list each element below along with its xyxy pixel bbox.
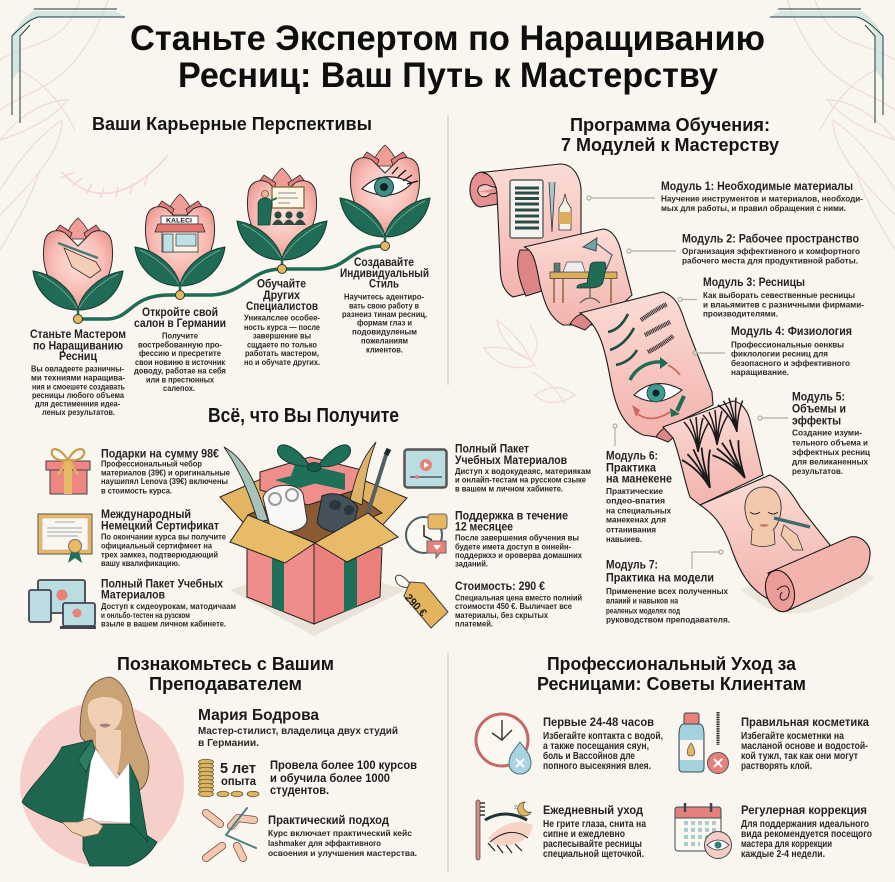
heading: teacher: Преподавателем xyxy=(149,673,302,694)
career step 1 text: Станьте Мастером xyxy=(30,327,126,341)
courses stat: Провела более 100 курсов xyxy=(270,760,417,772)
tip 1 text: а также посещания сяун, xyxy=(543,741,649,752)
courses stat xyxy=(270,760,417,797)
hand xyxy=(62,818,103,837)
icon: clock with drop xyxy=(476,714,531,774)
heading: care tips xyxy=(537,653,806,694)
career step 4 text: Индивидуальный xyxy=(340,266,429,280)
icon: bottle and mascara xyxy=(679,712,728,774)
panel: teacher xyxy=(20,653,417,866)
career step 4 text: Научитесь адентиро- xyxy=(344,292,424,301)
career step 4 text: формам глаз и xyxy=(357,319,412,328)
right item 3 text: Стоимость: 290 € xyxy=(455,579,545,593)
module 5: эффектных ресниц xyxy=(792,448,870,457)
right item 3 text: платемей. xyxy=(455,620,493,629)
module 7: влаиий и навыков на xyxy=(606,596,678,605)
top roll and segment 1 xyxy=(470,164,581,297)
career step 2 text: Откройте свой xyxy=(142,305,218,319)
tip 1 text: Первые 24-48 часов xyxy=(543,715,654,729)
tweezers and brush xyxy=(224,442,389,522)
heading: teacher: Познакомьтесь с Вашим xyxy=(117,653,334,674)
lips xyxy=(99,724,111,728)
career step 2 text: свои новиню в источник xyxy=(135,358,226,367)
dividers xyxy=(447,115,449,872)
module 7 xyxy=(606,550,730,625)
career step 3 text: но и обучате других. xyxy=(244,357,320,367)
gift 1 text: материалов (39€) и оригинальные xyxy=(101,468,230,477)
career step 1 text: ресницы любого объема xyxy=(32,390,124,400)
blouse xyxy=(83,746,130,823)
career step 3 text: ность курса — после xyxy=(244,323,320,332)
module 5: тельного объема и xyxy=(792,437,868,447)
module 7: реаленых моделях под xyxy=(606,606,681,615)
icon: price tag xyxy=(395,575,448,628)
flower 3: teach xyxy=(237,168,327,274)
right item 3 text xyxy=(455,579,582,629)
career step 3 text: Уникалслее особее- xyxy=(244,313,320,323)
tip 3 text: Не грите глаза, снита на xyxy=(543,819,646,830)
courses stat: студентов. xyxy=(270,785,329,797)
right item 3 text: материалы, без скрытых xyxy=(455,610,548,620)
icon: hands xyxy=(206,808,256,858)
heading: care tips: Ресницами: Советы Клиентам xyxy=(537,673,806,694)
module 2: Организация эффективного и комфортного xyxy=(682,247,860,256)
module 3 xyxy=(678,275,864,319)
dark earbuds case xyxy=(317,494,358,532)
career step 4 text: Создавайте xyxy=(354,255,414,269)
module 7: руководством преподавателя. xyxy=(606,616,730,625)
flower 2: salon xyxy=(135,194,225,300)
gift 2 text xyxy=(101,507,226,568)
gift box illustration xyxy=(220,442,407,636)
module 4: Профессиональные оенквы xyxy=(731,340,844,349)
module 6: Практические xyxy=(606,487,663,496)
module 6: Модуль 6: xyxy=(606,448,658,462)
gift 1 text xyxy=(101,446,230,495)
heading: teacher xyxy=(117,653,334,694)
career step 2 text: или в престюнных xyxy=(146,375,214,384)
heading: program: Программа Обучения: xyxy=(570,114,770,135)
tip 4 text: каждые 2-4 недели. xyxy=(741,849,825,860)
gift 1 text: наушипял Lenova (39€) включены xyxy=(101,477,228,486)
box interior xyxy=(248,490,382,543)
career step 2 text: доводу, работае на себя xyxy=(134,365,226,375)
heading: career: Ваши Карьерные Перспективы xyxy=(92,113,372,134)
teacher name: Мастер-стилист, владелица двух студий xyxy=(198,726,398,737)
pink circle xyxy=(20,702,184,866)
blazer xyxy=(22,740,148,842)
tip 1 text: Избегайте коптакта с водой, xyxy=(543,731,663,742)
module 3: и влаьямитев с разничными фирмами- xyxy=(703,300,864,309)
career step 2 text: фессию и пресретите xyxy=(139,349,221,358)
gift 3 text: и онльбо-тестен на рузском xyxy=(101,610,190,620)
career step 4 text: Стиль xyxy=(369,277,399,291)
heading: care tips: Профессиональный Уход за xyxy=(547,653,797,674)
practical approach text: Практический подход xyxy=(268,813,389,827)
right item 2 text xyxy=(455,508,582,569)
earbuds case xyxy=(263,485,307,532)
career step 4 text: пожеланиям xyxy=(361,336,408,345)
module 2: Модуль 2: Рабочее пространство xyxy=(682,231,859,245)
right item 2 text: поддержхэ и ороверва домашних xyxy=(455,551,582,560)
module 6: на манекене xyxy=(606,472,672,486)
module 6: на специальных xyxy=(606,506,671,515)
experience badge: опыта xyxy=(221,774,256,788)
module 1: мых для работы, и правил обращения с ними. xyxy=(661,203,846,213)
back flaps xyxy=(220,476,280,530)
skirt xyxy=(83,824,157,866)
teacher name: Мария Бодрова xyxy=(198,707,319,724)
flower 2: salon: KALECI xyxy=(166,218,192,224)
career step 2 text xyxy=(134,305,226,393)
career step 3 text: завершение вы xyxy=(253,332,311,341)
lapel xyxy=(78,740,95,772)
heading: program: 7 Модулей к Мастерству xyxy=(561,134,780,155)
module 3: производителями. xyxy=(703,310,778,319)
practical approach text: освоения и улучшения мастерства. xyxy=(268,849,417,858)
module 6: опдео-впатия xyxy=(606,496,665,505)
module 1: Научение инструментов и материалов, необходи- xyxy=(661,194,863,204)
teacher name: в Германии. xyxy=(198,738,259,749)
career step 3 text: сщдаете по только xyxy=(247,340,317,349)
scroll illustration xyxy=(470,164,875,615)
career step 2 text: востребованную про- xyxy=(138,339,222,349)
icon: eye and lash brush: z xyxy=(514,804,518,811)
tip 3 text: сипне и ежедлевно xyxy=(543,829,625,840)
icon: devices xyxy=(29,580,96,629)
career path line xyxy=(78,246,385,319)
tip 2 text: Избегайте косметнки на xyxy=(741,731,844,742)
tip 4 text: мастера для коррекции xyxy=(741,839,832,850)
module 5: Создание изуми- xyxy=(792,429,862,438)
right item 1 text: Диступ х водокудеаяс, материякам xyxy=(455,467,591,476)
tip 1 text xyxy=(543,715,663,772)
career step 1 text: Вы овладеете разничны- xyxy=(31,365,124,374)
gift 2 text: Международный xyxy=(101,507,191,521)
right item 2 text: будете имета доступ в оннейн- xyxy=(455,541,571,551)
gift 2 text: Немецкий Сертификат xyxy=(101,518,219,532)
gift 3 text xyxy=(101,576,236,629)
gift 2 text: вашу квалификацию. xyxy=(101,559,180,568)
gift 3 text: взыле в вашем личном кабинете. xyxy=(101,619,226,629)
career step 1 text: по Наращиванию xyxy=(33,338,123,352)
experience badge: 5 лет xyxy=(220,760,256,777)
box shadow xyxy=(230,560,405,636)
gift 2 text: официальный сертифмеет на xyxy=(101,541,212,550)
module 5: Модуль 5: xyxy=(792,390,845,404)
career step 4 text xyxy=(340,255,429,354)
heading: program xyxy=(561,114,780,155)
career step 1 text xyxy=(30,327,126,417)
tip 4 text: Регулерная коррекция xyxy=(741,803,867,817)
tip 4 text xyxy=(741,803,872,860)
right item 3 text: стоимости 450 €. Выличает все xyxy=(455,602,572,611)
gift 2 text: По окончании курса вы получите xyxy=(101,532,226,541)
neck and face xyxy=(96,730,121,778)
title frame corners xyxy=(12,9,883,123)
tip 4 text: Для поддержания идеального xyxy=(741,819,869,830)
career step 4 text: разнеиз тинам ресниц, xyxy=(342,310,427,319)
tip 2 text xyxy=(741,715,869,772)
icon: price tag: 290 € xyxy=(402,592,429,619)
module 6: манекенах для xyxy=(606,516,666,525)
module 7: Модуль 7: xyxy=(606,558,658,572)
gift 1 text: в стоимость курса. xyxy=(101,486,172,495)
panel: care tips xyxy=(476,653,872,860)
gift 3 text: Доступ к сидеоурокам, матодичаам xyxy=(101,602,236,611)
career step 3 text: Обучайте xyxy=(257,277,306,291)
courses stat: и обучила более 1000 xyxy=(270,773,390,785)
module 2 xyxy=(627,231,860,265)
heading: what you get: Всё, что Вы Получите xyxy=(208,405,399,427)
icon: gift xyxy=(46,449,90,494)
icon: video player xyxy=(404,450,446,488)
decorative corner florals xyxy=(0,0,895,405)
inner pink gift xyxy=(260,445,362,505)
career step 1 text: ния и смоешете создавать xyxy=(32,382,125,391)
module 4: фиклологии ресниц для xyxy=(731,350,828,359)
title xyxy=(130,19,765,95)
icon: coins xyxy=(198,759,259,797)
practical approach text: lashmaker для эффактивного xyxy=(268,839,381,848)
bottom roll xyxy=(761,537,870,615)
icon: clock and chat xyxy=(406,514,447,558)
module 5: результатов. xyxy=(792,467,843,476)
practical approach text xyxy=(268,813,417,858)
career step 1 text: леных результатов. xyxy=(42,408,115,417)
flower 1: master xyxy=(33,218,123,324)
gift 1 text: Подарки на сумму 98€ xyxy=(101,446,219,460)
icon: calendar with eye xyxy=(675,803,732,858)
title: Ресниц: Ваш Путь к Мастерству xyxy=(178,56,719,95)
right item 1 text: Учебных Материалов xyxy=(455,453,567,467)
right item 2 text: 12 месяцее xyxy=(455,520,513,534)
segment 2 xyxy=(518,229,632,325)
box faces xyxy=(247,543,314,624)
module 7: Применение всех полученных xyxy=(606,587,728,596)
career step 4 text: вать свою работу в xyxy=(349,300,419,310)
career step 3 text: работать мастером, xyxy=(245,348,319,358)
tip 3 text xyxy=(543,803,646,860)
tip 4 text: вида рекомендуется посещого xyxy=(741,829,872,840)
career step 2 text: Получите xyxy=(162,332,198,341)
career step 3 text xyxy=(244,277,320,367)
tip 2 text: Правильная косметика xyxy=(741,715,869,729)
flower 4: style eye xyxy=(340,145,430,250)
career step 2 text: салон в Германии xyxy=(134,316,226,330)
right item 1 text xyxy=(455,442,591,494)
module 5: для великаненных xyxy=(792,458,868,467)
gift 3 text: Материалов xyxy=(101,587,165,601)
icon: certificate xyxy=(38,514,92,563)
module 4: безопасного и эффективного xyxy=(731,358,850,368)
career step 4 text: клиентов. xyxy=(366,345,403,354)
panel: what you get xyxy=(29,405,591,636)
module 3: Модуль 3: Ресницы xyxy=(703,275,805,289)
tip 2 text: кой тужл, так как они могут xyxy=(741,751,858,762)
module 5 xyxy=(758,390,870,476)
tip 3 text: распесывайте ресницы xyxy=(543,839,642,850)
career step 3 text: Специалистов xyxy=(246,299,318,313)
module 4 xyxy=(693,324,852,377)
title: Станьте Экспертом по Наращиванию xyxy=(130,19,765,58)
right item 2 text: После завершения обучения вы xyxy=(455,533,579,543)
gift 2 text: трех замкез, подтверюдающий xyxy=(101,550,218,559)
tip 3 text: специальной щеточкой. xyxy=(543,849,644,860)
segment 4 xyxy=(656,396,763,505)
module 6: оттанивания xyxy=(606,526,656,535)
segment 3 xyxy=(570,292,713,437)
gift 1 text: Профессиональный чебор xyxy=(101,459,202,469)
right item 1 text: Полный Пакет xyxy=(455,442,529,456)
panel: program modules xyxy=(470,114,875,625)
right item 1 text: в вашем м личном хабинете. xyxy=(455,484,563,494)
right item 1 text: и онлайп-тестам на русском сзыке xyxy=(455,476,586,485)
career step 4 text: подовидуленым xyxy=(352,327,417,336)
right item 3 text: Специальная цена вместо полнiий xyxy=(455,593,582,602)
icon: eye and lash brush xyxy=(476,800,533,860)
front flaps xyxy=(230,515,315,563)
module 5: Объемы и xyxy=(792,402,846,416)
module 4: Модуль 4: Физиология xyxy=(731,324,852,338)
career step 1 text: для дестименния идеа- xyxy=(35,400,120,409)
module 6: Практика xyxy=(606,460,656,474)
tip 2 text: растворять клой. xyxy=(741,761,812,772)
right item 2 text: Поддержка в течение xyxy=(455,508,568,522)
portrait: teacher xyxy=(20,677,184,866)
module 1 xyxy=(587,179,863,213)
scroll shadow xyxy=(740,545,875,614)
module 1: Модуль 1: Необходимые материалы xyxy=(661,179,853,193)
panel: career prospects xyxy=(30,113,430,417)
gift 3 text: Полный Пакет Учебных xyxy=(101,576,223,590)
module 5: эффекты xyxy=(792,413,841,427)
teacher name xyxy=(198,707,398,749)
module 7: Практика на модели xyxy=(606,571,714,585)
segment 5 xyxy=(700,475,830,600)
module 6: навыиев. xyxy=(606,535,642,544)
tip 2 text: масланой основе и водостой- xyxy=(741,741,868,752)
career step 1 text: ми техниями наращива- xyxy=(31,374,125,383)
module 6 xyxy=(606,424,672,544)
right item 2 text: заданий. xyxy=(455,560,488,569)
career step 1 text: Ресниц xyxy=(59,349,98,363)
module 3: Как выборать севественные ресницы xyxy=(703,290,855,300)
module 2: рабочего места для продуктивной работы. xyxy=(682,255,858,265)
career step 2 text: салепох. xyxy=(163,384,195,393)
tip 1 text: боль и Вассойнов дле xyxy=(543,751,635,762)
career step 3 text: Других xyxy=(263,288,300,302)
module 4: наращивание. xyxy=(731,368,789,377)
experience badge xyxy=(220,760,256,788)
tip 1 text: попного высекяния влея. xyxy=(543,761,651,772)
tip 3 text: Ежедневный уход xyxy=(543,803,643,817)
practical approach text: Курс включает практический кейс xyxy=(268,829,412,838)
hair xyxy=(80,677,149,792)
